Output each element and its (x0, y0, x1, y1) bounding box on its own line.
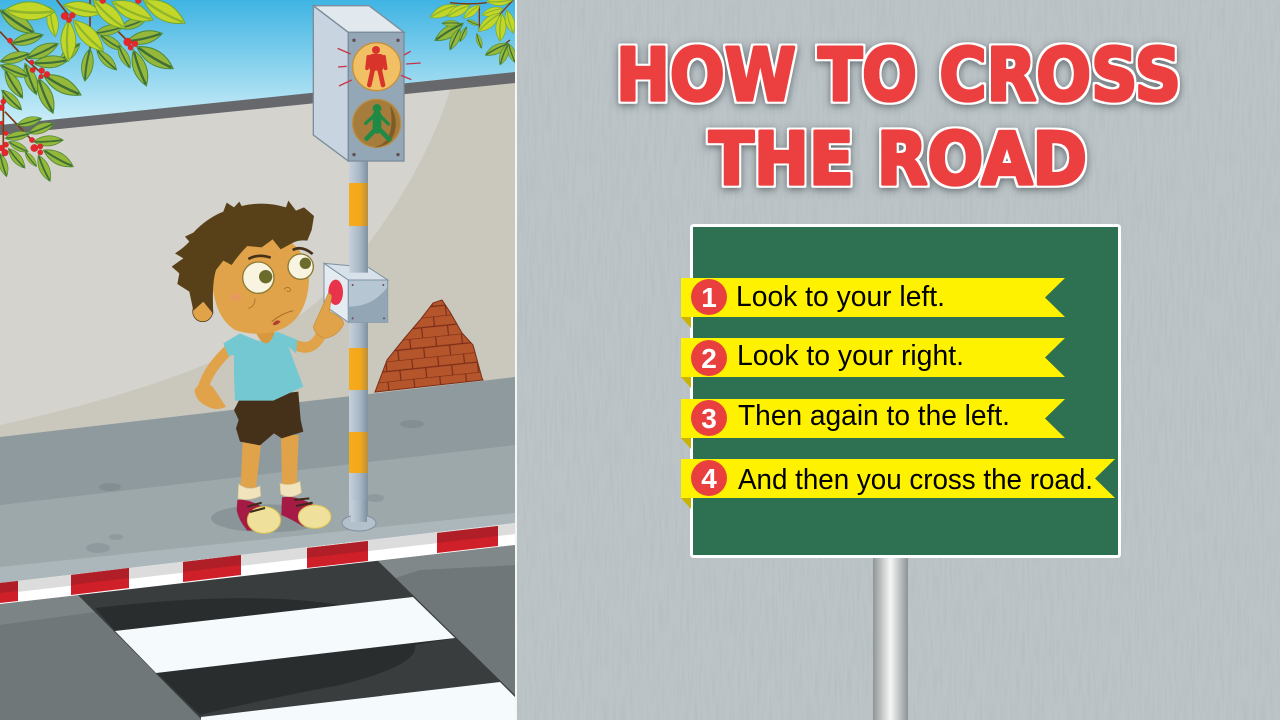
red berries (0, 0, 141, 156)
zebra crossing (77, 560, 515, 720)
ear (193, 302, 213, 322)
title line 2: THE ROAD (709, 117, 1087, 201)
neck (256, 331, 275, 344)
left hand (194, 383, 226, 409)
shorts (234, 392, 303, 445)
right panel background (515, 0, 1280, 720)
curb stripes (0, 523, 515, 604)
light casing (313, 6, 404, 161)
head (212, 233, 309, 334)
road (0, 540, 515, 720)
shadow under boy (211, 504, 309, 532)
foliage: top right branch (428, 0, 519, 67)
step 4 ribbon: And then you cross the road. (738, 464, 1093, 496)
shoes (237, 497, 331, 533)
green man light (353, 99, 401, 147)
leaves (0, 0, 189, 183)
red light rays (338, 48, 421, 86)
right forearm (298, 333, 322, 347)
wall top rail (0, 72, 515, 135)
branches (0, 0, 128, 157)
hair (172, 201, 314, 314)
title (616, 33, 1181, 201)
red man light (353, 43, 401, 91)
panel: street scene (0, 0, 519, 720)
legs (241, 435, 299, 488)
title line 1: HOW TO CROSS (616, 33, 1181, 117)
shirt (223, 332, 303, 401)
boy and button box (172, 190, 388, 533)
step 1 ribbon: Look to your left. (736, 281, 945, 313)
socks (238, 481, 301, 500)
eyes (243, 254, 313, 293)
eyebrows (248, 248, 313, 259)
step 2 ribbon: Look to your right. (737, 340, 964, 372)
step 2 ribbon: 2 (701, 343, 717, 374)
pointing hand (313, 293, 343, 338)
traffic light (313, 6, 421, 161)
green sign board (692, 226, 1120, 556)
sidewalk (0, 377, 515, 590)
brick mound (375, 300, 483, 392)
step 4 ribbon (681, 459, 1115, 509)
sky (0, 0, 515, 125)
signpost (873, 556, 908, 720)
wall (0, 78, 515, 440)
right branches (450, 0, 513, 45)
step 1 ribbon: 1 (701, 282, 717, 313)
face details (230, 287, 293, 325)
step 3 ribbon: Then again to the left. (738, 400, 1010, 432)
step 4 ribbon: 4 (701, 463, 717, 494)
pole (342, 160, 376, 531)
step 3 ribbon (681, 399, 1065, 449)
divider line (515, 0, 517, 720)
left arm (203, 349, 229, 387)
button box (322, 262, 390, 324)
step 2 ribbon (681, 338, 1065, 388)
right leaves (428, 0, 519, 67)
step 1 ribbon (681, 278, 1065, 328)
foliage: top left branch (0, 0, 189, 183)
step 3 ribbon: 3 (701, 403, 717, 434)
